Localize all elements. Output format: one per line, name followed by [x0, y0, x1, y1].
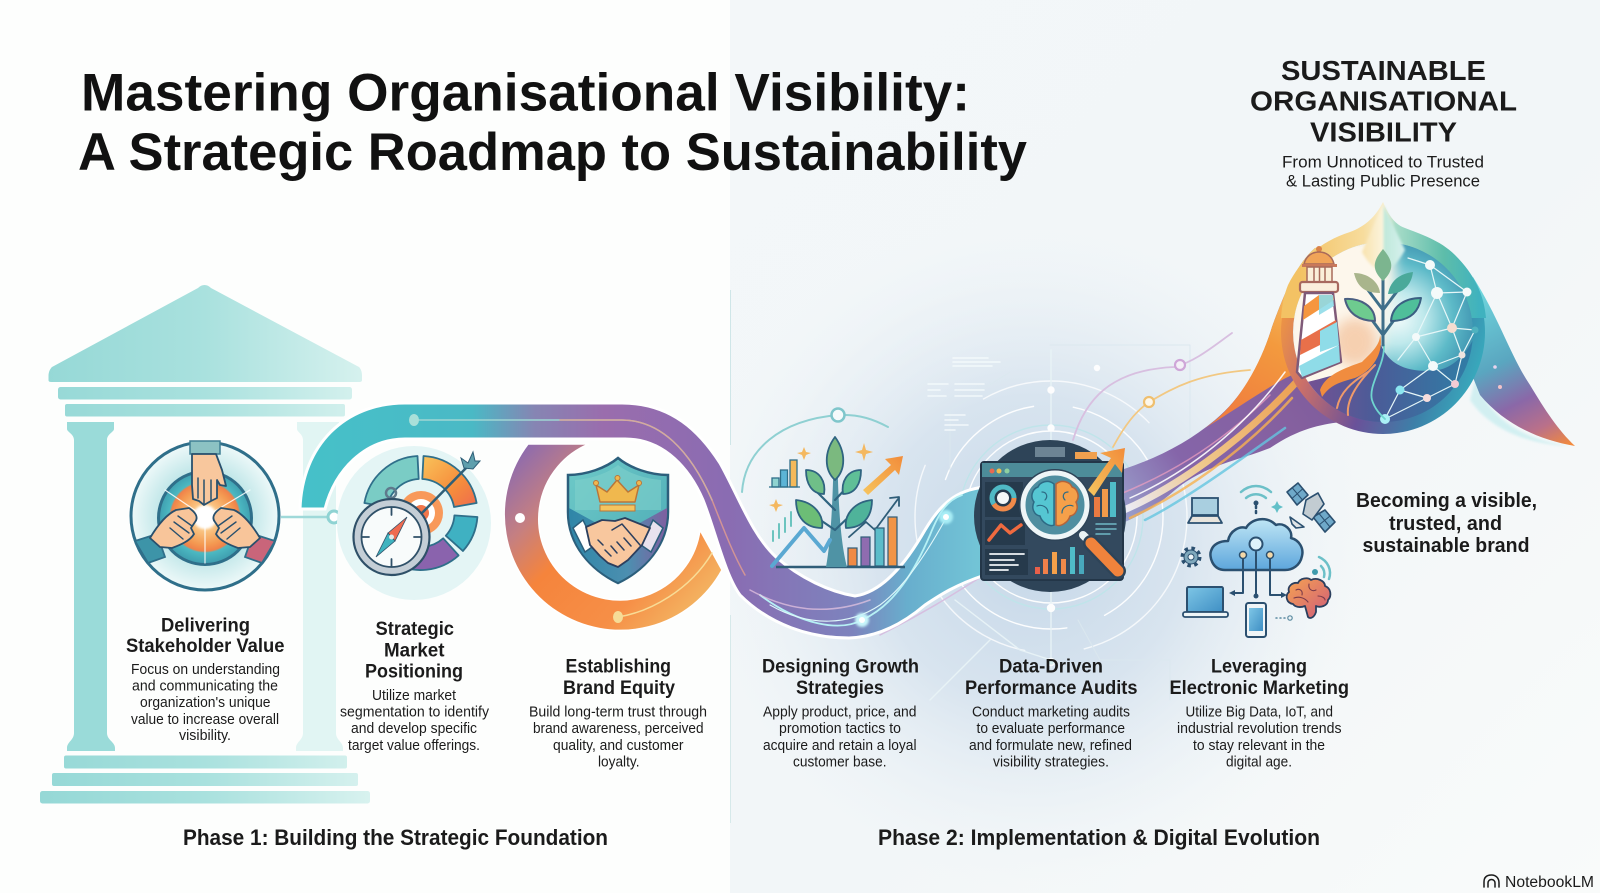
body text: to evaluate performance — [976, 721, 1125, 737]
title: Mastering Organisational Visibility: — [81, 64, 970, 122]
body text: acquire and retain a loyal — [763, 738, 916, 754]
pie segments — [364, 456, 477, 570]
body text: target value offerings. — [348, 738, 480, 754]
phase 2 label: Phase 2: Implementation & Digital Evolution — [878, 825, 1320, 850]
handshake — [573, 518, 663, 567]
upper ribbon to summit — [1105, 238, 1345, 525]
panel: temple foundation — [40, 285, 370, 804]
callout: becoming a visible brand: sustainable brand — [1362, 535, 1530, 557]
body text — [763, 704, 916, 770]
callout: becoming a visible brand — [1356, 490, 1537, 557]
body text: and communicating the — [132, 678, 278, 694]
satellite — [1287, 483, 1335, 532]
summit heading: SUSTAINABLE — [1281, 55, 1486, 86]
card: strategic market positioning — [340, 619, 490, 754]
callout: becoming a visible brand: Becoming a visible, — [1356, 490, 1537, 512]
roots — [1320, 335, 1385, 419]
phase 1 label: Phase 1: Building the Strategic Foundation — [183, 825, 608, 850]
temple steps — [40, 756, 370, 804]
body text: Build long-term trust through — [529, 704, 707, 720]
small pale bars — [773, 512, 791, 541]
roadmap ribbon — [300, 403, 985, 638]
heading: Strategic — [376, 619, 454, 640]
base line — [776, 566, 905, 568]
globe interior — [1293, 244, 1472, 422]
lighthouse — [1297, 246, 1341, 378]
cloud connectors — [1229, 538, 1287, 598]
body text — [340, 688, 490, 754]
sparkle stars — [769, 443, 873, 512]
cloud — [1210, 519, 1302, 570]
body text: Conduct marketing audits — [972, 704, 1130, 720]
body text: brand awareness, perceived — [533, 721, 704, 737]
upper ribbon streaks — [1118, 372, 1300, 520]
wifi top — [1241, 486, 1271, 515]
right bars — [1094, 482, 1116, 534]
title: A Strategic Roadmap to Sustainability — [78, 123, 1028, 182]
body text: segmentation to identify — [340, 704, 490, 720]
summit subtitle: From Unnoticed to Trusted — [1282, 154, 1484, 172]
phase divider line — [730, 290, 732, 823]
technology network backdrop — [915, 345, 1190, 700]
ribbon centre line — [418, 420, 712, 500]
orange growth arrow — [863, 456, 903, 495]
top hand — [190, 441, 226, 505]
compass — [354, 488, 430, 575]
body text: Utilize Big Data, IoT, and — [1186, 704, 1333, 720]
card: data-driven performance audits — [965, 656, 1138, 770]
summit subtitle — [1282, 154, 1484, 190]
icon: growth strategies tree and charts — [769, 437, 905, 567]
body text: quality, and customer — [553, 738, 684, 754]
heading — [965, 656, 1138, 699]
donut gauge — [985, 482, 1023, 517]
body text: Focus on understanding — [131, 662, 280, 678]
growth arc with node — [742, 408, 888, 492]
mini bar chart — [769, 460, 800, 487]
heading: Delivering — [161, 616, 250, 636]
wifi right — [1312, 557, 1330, 579]
ring dots and accent — [515, 513, 712, 623]
left column — [67, 422, 115, 751]
body text: promotion tactics to — [779, 721, 901, 737]
card: establishing brand equity — [529, 656, 707, 770]
right hand — [213, 508, 275, 563]
summit heading — [1250, 55, 1517, 190]
icon: stakeholder value hands — [131, 441, 279, 590]
peak highlight — [1362, 204, 1405, 271]
body text: Apply product, price, and — [763, 704, 916, 720]
network sphere nodes — [1380, 258, 1478, 424]
heading: Performance Audits — [965, 678, 1138, 699]
body text: customer base. — [793, 754, 886, 770]
body text: organization's unique — [140, 695, 270, 711]
heading: Designing Growth — [762, 656, 919, 678]
heading — [762, 656, 919, 699]
summit heading: ORGANISATIONAL — [1250, 86, 1517, 116]
summit peak — [1281, 202, 1486, 318]
gold left wing — [1205, 238, 1345, 428]
summit heading: VISIBILITY — [1310, 116, 1457, 148]
arrow into target — [422, 452, 480, 513]
sparkle — [1271, 501, 1283, 513]
leaves — [796, 437, 872, 528]
connector from stakeholder value to positioning — [281, 511, 340, 523]
phone — [1246, 603, 1266, 637]
right column — [296, 422, 343, 751]
bar chart right — [848, 517, 897, 566]
heading — [365, 619, 463, 682]
heading: Establishing — [566, 656, 671, 678]
icon: notebooklm logo — [1484, 875, 1499, 887]
trunk and branches — [826, 440, 847, 567]
heading: Positioning — [365, 662, 463, 682]
line chart — [985, 520, 1025, 545]
body text: Utilize market — [372, 688, 456, 704]
heading: Data-Driven — [999, 656, 1103, 678]
heading: Leveraging — [1211, 656, 1307, 678]
text lines — [985, 549, 1028, 575]
temple entablature — [58, 387, 352, 416]
body text: to stay relevant in the — [1193, 738, 1325, 754]
card: leveraging electronic marketing — [1170, 656, 1349, 770]
heading — [563, 656, 675, 699]
thin trend arrow — [849, 497, 899, 537]
top readouts — [1035, 447, 1097, 459]
globe outer ring — [1281, 230, 1485, 434]
icon: data-driven performance audit dashboard — [974, 440, 1126, 592]
temple pediment — [48, 285, 362, 382]
heading: Electronic Marketing — [1170, 678, 1349, 699]
body text — [1177, 704, 1342, 770]
blue zigzag — [772, 528, 830, 566]
body text: visibility strategies. — [993, 754, 1109, 770]
NotebookLM watermark: NotebookLM — [1505, 874, 1594, 891]
body text — [131, 662, 280, 744]
magnifying glass and brain — [1020, 470, 1118, 571]
callout: becoming a visible brand: trusted, and — [1389, 513, 1502, 535]
heading: Strategies — [796, 678, 884, 699]
dotted node — [1276, 616, 1292, 620]
ribbon light streaks — [750, 495, 962, 627]
body text — [529, 704, 707, 770]
left hand — [135, 508, 197, 563]
emblem: sustainable visibility globe — [1280, 202, 1486, 434]
body text: digital age. — [1226, 754, 1292, 770]
summit subtitle: & Lasting Public Presence — [1286, 172, 1480, 190]
laptop top left — [1188, 498, 1222, 523]
right wing — [1470, 277, 1575, 446]
brain — [1287, 578, 1330, 618]
thin coloured trend curves — [880, 333, 1250, 635]
sapling — [1345, 249, 1421, 345]
body text: and develop specific — [351, 721, 477, 737]
body text: value to increase overall — [131, 712, 279, 728]
icon: market positioning compass and target — [337, 446, 491, 600]
icon: brand equity shield — [568, 458, 668, 583]
crown — [596, 480, 639, 502]
heading: Brand Equity — [563, 678, 675, 699]
ribbon start node — [409, 414, 419, 426]
laptop bottom — [1183, 587, 1228, 617]
orange arrow — [1088, 448, 1125, 496]
body text: and formulate new, refined — [969, 738, 1132, 754]
card: designing growth strategies — [762, 656, 919, 770]
dashboard header — [982, 463, 1122, 477]
body text — [969, 704, 1132, 770]
heading — [1170, 656, 1349, 699]
gear — [1183, 549, 1199, 565]
card: delivering stakeholder value — [126, 616, 284, 744]
bottom bars — [1035, 547, 1084, 574]
icon: brand equity ribbon ring — [504, 444, 722, 630]
icon: electronic marketing cloud and devices — [1183, 483, 1335, 637]
body text: visibility. — [179, 728, 231, 744]
heading: Stakeholder Value — [126, 636, 284, 657]
body text: loyalty. — [598, 754, 640, 770]
heading: Market — [384, 640, 445, 662]
body text: industrial revolution trends — [1177, 721, 1342, 737]
title — [78, 64, 1028, 182]
heading — [126, 616, 284, 657]
